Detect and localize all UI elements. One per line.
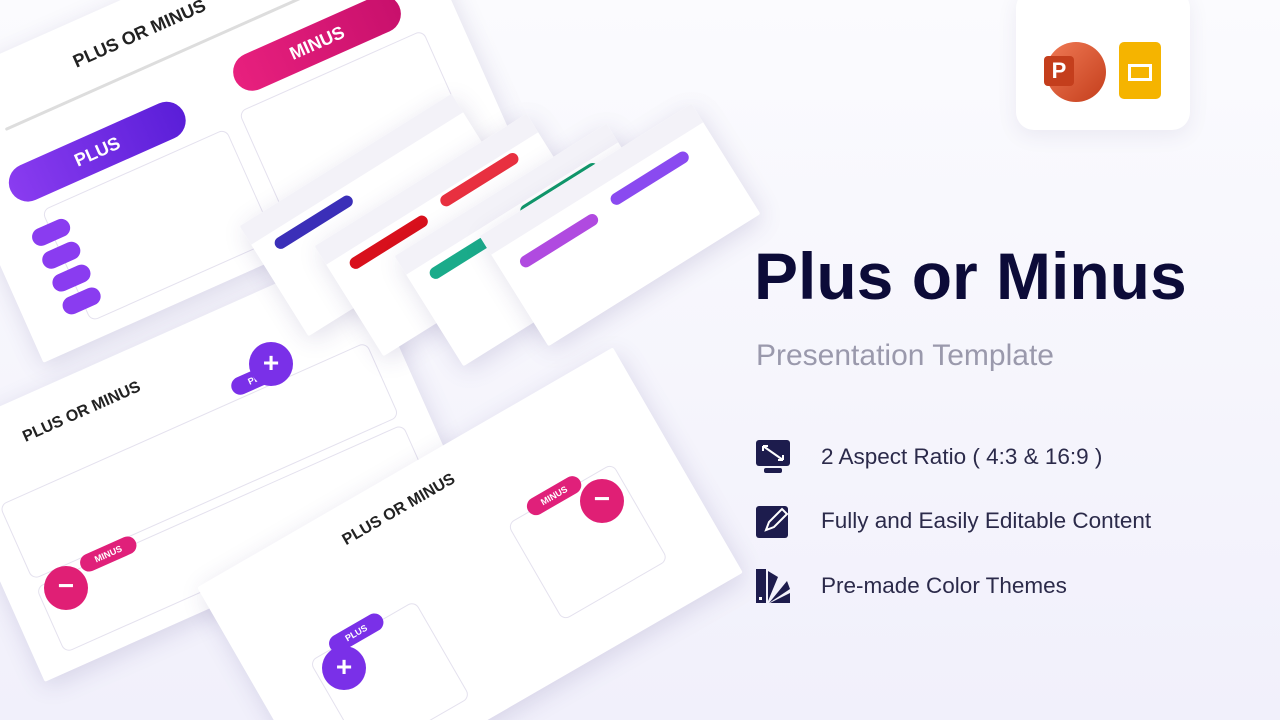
feature: color themes — [756, 569, 1067, 603]
feature: color themes: Pre-made Color Themes — [821, 573, 1067, 598]
small slides stack — [240, 94, 764, 372]
text: + — [336, 651, 352, 682]
slide: bottom: MINUS — [539, 484, 569, 507]
title: Plus or Minus — [754, 239, 1187, 313]
icon: google slides — [1119, 42, 1161, 99]
minus circle middle — [44, 566, 88, 610]
slide: top left purple/pink — [0, 0, 519, 363]
icon: powerpoint: P — [1052, 58, 1066, 83]
slide: middle left: PLUS — [246, 368, 272, 387]
minus circle middle: − — [58, 570, 74, 601]
feature: aspect ratio — [756, 440, 1102, 473]
minus pill — [227, 0, 407, 97]
feature: editable: Fully and Easily Editable Content — [821, 508, 1151, 533]
text: − — [594, 483, 610, 514]
app icons box — [1016, 0, 1190, 130]
feature: editable — [756, 506, 1151, 538]
slide: bottom: PLUS OR MINUS — [340, 471, 458, 549]
plus pill: PLUS — [71, 133, 123, 171]
slide: middle left: MINUS — [93, 544, 124, 564]
slide: bottom: PLUS — [343, 623, 369, 643]
plus circle middle — [249, 342, 293, 386]
slide: bottom — [197, 347, 743, 720]
minus pill: MINUS — [286, 22, 348, 64]
feature: aspect ratio: 2 Aspect Ratio ( 4:3 & 16:9 ) — [821, 444, 1102, 469]
plus circle middle: + — [263, 347, 279, 378]
icon: powerpoint — [1046, 42, 1106, 102]
slide: middle left — [0, 248, 465, 682]
subtitle: Presentation Template — [756, 339, 1054, 372]
slide: middle left: PLUS OR MINUS — [20, 378, 143, 446]
plus pill — [3, 96, 192, 208]
